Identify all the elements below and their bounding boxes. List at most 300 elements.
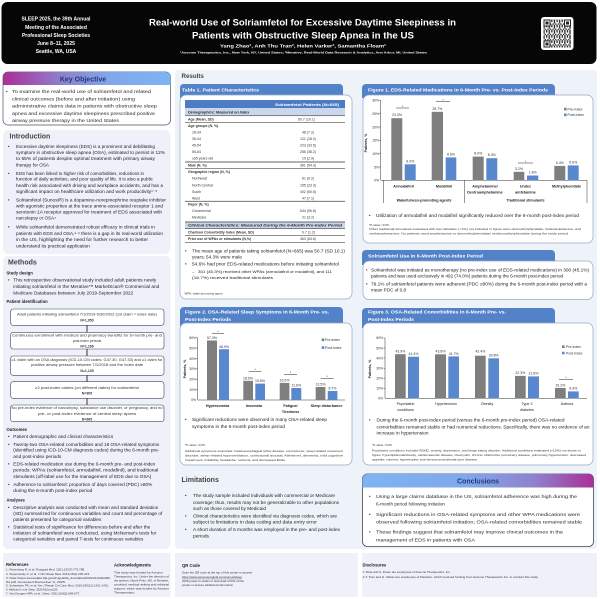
study design: Medicare Databases between July 2019-September 2022 <box>13 290 134 296</box>
table 1 data: Commercial <box>192 209 211 213</box>
flow diagram: patient identification: pre- or post-index evidence of central sleep apnea <box>38 412 136 416</box>
figure 2 takeaway: symptoms in the 6-month post-index period <box>192 424 286 429</box>
analyses: • <box>8 505 10 510</box>
study design: initiating solriamfetol in the Merative™ MarketScan® Commercial and <box>13 284 160 289</box>
introduction heading: Introduction <box>10 134 50 140</box>
figure 3 legend <box>562 345 583 355</box>
conclusions header <box>362 474 594 488</box>
bar chart: comorbidities: 43.9% <box>395 350 405 354</box>
table 1 data: ≥65 years old <box>192 157 213 161</box>
QR code text: Scan the QR code at the top of this poster to access <box>182 570 253 574</box>
bar chart: sleep symptoms: 30% <box>189 367 196 371</box>
bar chart: comorbidities: 42.4% <box>475 350 485 354</box>
figure 3 footnotes <box>372 443 586 462</box>
introduction bullets: with agonistic properties at the trace amine-associated receptor 1 and <box>16 203 164 208</box>
bar chart: comorbidities <box>368 336 587 412</box>
limitations heading: Limitations <box>182 477 219 484</box>
flow diagram: patient identification: Continuous enrollment with medical and pharmacy benefits for 6-month pre- and <box>12 334 162 338</box>
table 1 title: Table 1. Patient Characteristics <box>182 88 260 92</box>
QR code heading: QR Code <box>182 563 201 568</box>
analyses: (SD) summarized for continuous variables and count and percentage of <box>13 511 163 516</box>
conclusions heading: Conclusions <box>457 478 499 486</box>
figure 2 title: Figure 2. OSA-Related Sleep Symptoms in 6-Month Pre- vs. <box>185 310 329 314</box>
bar chart: sleep symptoms <box>183 330 345 414</box>
figure 3 takeaway: increase in hypertension <box>376 430 429 436</box>
figure 3 takeaway <box>369 418 590 436</box>
disclosures text: A.T. Tran and H. Varker are employees of Merative, which received funding from Axsome Therapeutics Inc. to conduct this study. <box>362 575 539 579</box>
outcomes: periods: WPAs (solriamfetol, armodafinil, modafinil), and traditional <box>13 468 158 472</box>
bar chart: EDS-related medications: 8.6% <box>447 152 455 156</box>
limitations bullets: A short duration of 6 months was employed in the pre- and post-index <box>193 527 341 532</box>
acknowledgments: the authors, Nicole Pinto, MS, of Merative, <box>114 578 169 582</box>
disclosures text <box>362 570 539 579</box>
table 1 data: Payor (N, %) <box>188 203 209 207</box>
table 1 data: South <box>192 190 201 194</box>
panel: table 1 <box>180 84 352 299</box>
solriamfetol use bullets: • <box>366 282 368 287</box>
flow diagram: patient identification: N=905 <box>82 392 92 396</box>
bar chart: sleep symptoms: 15.8% <box>255 379 265 383</box>
outcomes: • <box>8 442 10 447</box>
figure 1 footnotes: Other traditional stimulants evaluated with low utilization (<1%) not included in figure were dexmethylphenidate, lisdexamfetamine, and <box>369 227 581 231</box>
limitations bullets: • <box>185 527 187 532</box>
table 1 data: 0.7 (1.2) <box>302 230 315 234</box>
table 1 data: 223 (33.5) <box>300 144 316 148</box>
figure 2 legend: Pre-index <box>325 338 340 342</box>
references: lbl.pdf. Accessed December 9, 2025. <box>6 580 66 584</box>
panel: introduction <box>3 130 170 254</box>
introduction bullets: to 65% of patients despite optimal treatment with primary airway <box>16 156 156 161</box>
figure 1 legend: Pre-index <box>568 107 583 111</box>
introduction bullets: Solriamfetol (Sunosi®) is a dopamine-norepinephrine reuptake inhibitor <box>16 197 167 202</box>
bar chart: EDS-related medications: amfetamine <box>515 190 536 194</box>
key objective text <box>6 89 158 123</box>
flow diagram: patient identification: N=1,135 <box>80 369 94 373</box>
table 1 data: Age groups (N, %) <box>188 124 218 128</box>
conclusions bullets: • <box>369 512 371 517</box>
conclusions bullets: management of EDS in patients with OSA <box>376 538 475 543</box>
methods heading: Methods <box>8 260 37 266</box>
introduction bullets <box>8 144 167 248</box>
figure 2 footnotes: disorder, sleep-related hypoventilation, confusional arousal, Alzheimer, dementia, mild cognitive <box>185 454 343 458</box>
bar chart: EDS-related medications: 10% <box>372 152 379 156</box>
bar chart: comorbidities: Obesity <box>481 402 493 406</box>
acknowledgments: provided medical writing and editorial <box>114 583 169 587</box>
figure 1 title: Figure 1. EDS-Related Medications in 6-Month Pre- vs. Post-Index Periods <box>368 88 548 92</box>
figure 3 takeaway: During the 6-month post-index period (versus the 6-month pre-index period) OSA-related <box>376 418 565 422</box>
introduction bullets: • <box>8 224 10 229</box>
bar chart: EDS-related medications: Traditional stimulants <box>506 198 545 202</box>
figure 2 takeaway: Significant reductions were observed in many OSA-related sleep <box>192 417 328 422</box>
bar chart: comorbidities: Patients, % <box>368 359 372 378</box>
solriamfetol use bullets: 79.1% of solriamfetol patients were adherent (PDC ≥80%) during the 6-month post-index period with a <box>371 282 588 287</box>
figure 2 footnotes <box>185 443 343 462</box>
outcomes: stimulants (off-label use for the management of EDS due to OSA) <box>13 474 152 479</box>
figure 3 footnotes: *P-value <0.05. <box>372 443 393 447</box>
limitations bullets: • <box>185 493 187 498</box>
table 1 data: West <box>192 196 200 200</box>
flow diagram: patient identification: ≥2 post-index claims (on different dates) for solriamfetol <box>35 386 139 390</box>
limitations bullets <box>185 493 341 538</box>
introduction bullets: While solriamfetol demonstrated robust efficacy in clinical trials in <box>16 224 156 229</box>
bar chart: comorbidities: 41.4% <box>409 352 418 356</box>
disclosures text: Y. Zhao and S. Floam are employees of Axsome Therapeutics, Inc. <box>362 570 451 574</box>
table 1 takeaways: (16.7%) received traditional stimulants <box>192 276 273 280</box>
bar chart: sleep symptoms: Patients, % <box>183 359 187 378</box>
bar chart: sleep symptoms: Tiredness <box>282 410 299 414</box>
outcomes: Patient demographic and clinical characteristics <box>13 434 113 439</box>
bar chart: sleep symptoms: Insomnia <box>246 404 263 408</box>
table 1 data: Geographic region (N, %) <box>188 170 230 174</box>
conclusions bullets: Using a large claims database in the US, solriamfetol adherence was high during the <box>376 494 578 499</box>
bar chart: sleep symptoms: 60% <box>189 336 196 340</box>
figure 3 title: Figure 3. OSA-Related Comorbidities in 6-Month Pre- vs. <box>368 310 506 314</box>
table 1 data: Medicare <box>192 216 206 220</box>
references: 3. https://www.accessdata.fda.gov/drugsatfda_docs/label/2022/211230s006 <box>6 576 110 580</box>
figure 2 footnotes: Additional symptoms examined: Gastroesophageal reflux disease, somnolence, sleep-related movement <box>185 449 343 453</box>
acknowledgments <box>114 562 169 595</box>
bar chart: EDS-related medications: 8.3% <box>488 153 496 157</box>
bar chart: comorbidities: 10.2% <box>555 383 565 387</box>
analyses: Statistical tests of significance for differences before and after the <box>13 524 151 530</box>
bar chart: sleep symptoms: Sleep disturbance <box>311 404 342 408</box>
QR code text: poster or access additional information. <box>182 583 234 587</box>
bar chart: EDS-related medications: Methylphenidate <box>552 184 581 188</box>
panel: solriamfetol use <box>362 250 593 300</box>
conclusions bullets: These findings suggest that solriamfetol may improve clinical outcomes in the <box>376 530 564 535</box>
introduction bullets: • <box>8 144 10 149</box>
bar chart: sleep symptoms: 11.6% <box>291 384 301 388</box>
table 1 data: Demographics: Measured on Index <box>188 111 250 115</box>
table 1 data: 21 (3.2) <box>302 216 314 220</box>
acknowledgments: Therapeutics. <box>114 591 135 595</box>
introduction bullets: in the US, highlighting the need for further research to better <box>16 237 149 242</box>
bar chart: EDS-related medications: Patients, % <box>364 133 368 152</box>
table 1 data: 155 (23.3) <box>300 183 316 187</box>
bar chart: EDS-related medications: 1.8% <box>529 170 537 174</box>
bar chart: comorbidities: 30% <box>376 366 383 370</box>
QR code text <box>182 570 253 587</box>
conclusions bullets: observed following solriamfetol initiation; OSA-related comorbidities remained stable <box>376 520 583 524</box>
references <box>6 562 110 595</box>
outcomes <box>6 427 160 493</box>
introduction bullets: EDS has been linked to higher risk of comorbidities, reductions in <box>16 171 145 176</box>
bar chart: comorbidities: Type 2 <box>521 402 533 406</box>
figure 3 title <box>368 310 506 322</box>
table 1 data: Male (N, %) <box>188 163 207 167</box>
bar chart: EDS-related medications: 23.3% <box>392 113 402 117</box>
panel: figure 1 <box>362 84 593 243</box>
table 1 takeaways: 54.6% had prior EDS-related medications before initiating solriamfetol <box>192 262 339 266</box>
references: References <box>6 562 29 567</box>
figure 3 footnotes: appetite, nausea, hypertrophic and temporomandibular joint disease. <box>372 458 478 462</box>
analyses: categorical variables and paired T-tests for continuous variables <box>13 536 143 542</box>
introduction bullets: health risk associated with driving and workplace accidents, and has a <box>16 183 164 188</box>
outcomes: • <box>8 462 10 466</box>
bar chart: comorbidities: Asthma <box>561 402 574 406</box>
bar chart: sleep symptoms: * <box>326 375 328 379</box>
introduction bullets: serotonin 1A receptor approved for treatment of EDS associated with <box>16 209 163 214</box>
limitations bullets: periods <box>193 534 209 538</box>
flow diagram: patient identification: N=1,166 <box>80 345 94 349</box>
analyses: Descriptive analysis was conducted with mean and standard deviation <box>13 505 159 510</box>
introduction bullets: significant impact on healthcare utilization and work productivity¹⁻³ <box>16 189 158 194</box>
table 1 data: 363 (54.6) <box>300 237 316 241</box>
table 1 takeaways: 301 (45.3%) received other WPAs (armodafinil or modafinil), and 111 <box>198 270 332 274</box>
bar chart: comorbidities: 21.8% <box>529 372 538 376</box>
bar chart: sleep symptoms: 40% <box>189 357 196 361</box>
bar chart: EDS-related medications: 20% <box>372 125 379 129</box>
key objective header <box>3 72 170 85</box>
study design: This retrospective observational study included adult patients newly <box>13 278 157 282</box>
bar chart: EDS-related medications: Amphetamine/ <box>472 184 498 188</box>
solriamfetol use bullets: patients and was used exclusively in 492 (74.0%) patients during the 6-month post-index period <box>371 273 564 278</box>
figure 1 footnotes <box>369 223 581 235</box>
introduction bullets: Excessive daytime sleepiness (EDS) is a prominent and debilitating <box>16 144 156 149</box>
key objective text: To examine the real-world use of solriamfetol and related <box>12 89 152 94</box>
figure 3 takeaway: • <box>369 418 371 422</box>
bar chart: comorbidities: 6.9% <box>569 387 577 391</box>
introduction bullets: patients with EDS and OSA,⁵·⁶ there is a gap in its real-world utilization <box>16 231 164 236</box>
acknowledgments: Acknowledgments <box>114 562 152 568</box>
table 1 data <box>185 100 345 242</box>
table 1 data: 50.7 (10.1) <box>298 118 315 122</box>
table 1 data: 55-64 <box>192 150 201 154</box>
poster title: Patients with Obstructive Sleep Apnea in the US <box>192 30 414 40</box>
bar chart: sleep symptoms: 20% <box>189 378 196 382</box>
acknowledgments: Therapeutics, Inc. Under the direction of <box>114 575 169 579</box>
bar chart: sleep symptoms: Hypersomnia <box>206 404 230 408</box>
bar chart: sleep symptoms: 12.5% <box>316 383 325 387</box>
limitations bullets: such as those covered by Medicaid <box>193 506 267 511</box>
poster title <box>149 18 456 40</box>
table 1 data: 18-34 <box>192 130 201 134</box>
panel: references and acknowledgments <box>3 553 170 597</box>
outcomes: and post-index periods <box>13 454 61 459</box>
conference information: Professional Sleep Societies <box>22 33 90 39</box>
table 1 data: 256 (38.2) <box>300 150 316 154</box>
solriamfetol use bullets: Solriamfetol was initiated as monotherapy (no pre-index use of EDS-related medications) in 300 (45.1%) <box>371 267 590 272</box>
solriamfetol use title: Solriamfetol Use in 6-Month Post-Index Period <box>368 254 483 258</box>
analyses: patients presented for categorical variables <box>13 517 101 522</box>
bar chart: sleep symptoms: 0% <box>191 398 196 402</box>
bar chart: EDS-related medications: * <box>525 160 527 164</box>
key objective text: clinical outcomes (before and after initiation) using <box>12 96 136 102</box>
table 1 data: 19 (2.9) <box>302 157 314 161</box>
bar chart: sleep symptoms: 8.7% <box>329 387 336 391</box>
bar chart: EDS-related medications: * <box>442 98 444 102</box>
table 1 data: 47 (7.1) <box>302 196 314 200</box>
bar chart: EDS-related medications: 25% <box>372 112 379 116</box>
introduction bullets: • <box>8 197 10 202</box>
conclusions bullets: • <box>369 494 371 499</box>
figure 2 takeaway: • <box>185 417 187 422</box>
figure 2 legend: Post-index <box>325 346 342 350</box>
solriamfetol use bullets: mean PDC of 0.8 <box>371 288 407 292</box>
figure 1 legend: Post-index <box>568 113 584 117</box>
bar chart: comorbidities: 40% <box>376 356 383 360</box>
figure 3 footnotes: Psychiatric conditions included ADHD, anxiety, depression, and binge eating disorder. Additional conditions evaluated (>10%) not shown in <box>372 448 581 452</box>
figure 2 title <box>185 310 329 322</box>
bar chart: EDS-related medications: 5% <box>374 165 379 169</box>
conclusions bullets: • <box>369 530 371 535</box>
conference information: Seattle, WA, USA <box>36 49 77 55</box>
bar chart: EDS-related medications: 25.7% <box>432 107 442 111</box>
bar chart: sleep symptoms: * <box>290 371 292 375</box>
references: 5. Schweitzer PK, et al. Am J Respir Crit Care Med. 2019;199(11):1421-1431. <box>6 583 109 587</box>
outcomes: (identified using ICD-10-CM diagnosis codes) during the 6-month pre- <box>13 448 160 452</box>
table 1 takeaways: • <box>185 262 187 266</box>
analyses: • <box>8 524 10 530</box>
outcomes: Adherence to solriamfetol: proportion of days covered (PDC) ≥80% <box>13 482 152 487</box>
bar chart: sleep symptoms: Fatigue/ <box>283 404 298 408</box>
bar chart: comorbidities: 22.3% <box>515 371 525 375</box>
study design: Study design <box>6 270 33 276</box>
figure 2 legend <box>322 338 342 350</box>
references: 7. Van Dongen HPA, et al. Chest. 2021;160(2):669-677. <box>6 591 80 595</box>
flow diagram: patient identification: N=665 <box>82 418 92 422</box>
figure 2 title: Post-Index Periods <box>185 317 231 322</box>
bar chart: EDS-related medications: Wakefulness-promoting agents <box>397 198 451 202</box>
table 1 takeaways: – <box>192 270 195 274</box>
flow diagram: patient identification: No pre-index evidence of narcolepsy, substance use disorder, or pregnancy, and no <box>12 406 163 410</box>
bar chart: comorbidities: * <box>565 376 567 380</box>
references: 2. Stepnowsky C, et al. J Clin Sleep Med. 2019;15(2):235-243. <box>6 572 90 576</box>
figure 3 legend: Post-index <box>566 351 583 355</box>
figure 1 footnotes: methamphetamine. No patients used amphetamine or dexmethylphenidate/ serdexmethylphenidate during the study period. <box>369 231 569 235</box>
bar chart: EDS-related medications: * <box>402 105 404 109</box>
authors <box>180 44 427 54</box>
table 1 data: 644 (96.8) <box>300 209 316 213</box>
figure 3 takeaway: comorbidities remained stable or had numerical reductions. Specifically, there was no evidence of an <box>376 424 590 430</box>
limitations bullets: coverage; thus, results may not be generalizable to other populations <box>193 500 339 505</box>
outcomes: • <box>8 434 10 439</box>
panel: key objective <box>3 72 170 125</box>
conference information <box>22 16 91 55</box>
bar chart: EDS-related medications: Undec <box>520 184 531 188</box>
bar chart: sleep symptoms: 18.5% <box>243 376 253 380</box>
introduction bullets: symptom in obstructive sleep apnea (OSA), estimated to persist in 12% <box>16 150 165 155</box>
solriamfetol use bullets: • <box>366 267 368 272</box>
figure 1 footnotes: *P-value <0.05. <box>369 223 390 227</box>
bar chart: comorbidities: 10% <box>376 386 383 390</box>
table 1 takeaways: years; 54.3% were male <box>192 254 243 260</box>
study design <box>6 270 160 296</box>
analyses: Analyses <box>6 498 26 502</box>
bar chart: comorbidities: 41.7% <box>449 352 459 356</box>
flow diagram: patient identification: N=1,050 <box>80 318 94 322</box>
table 1 takeaways <box>185 248 346 280</box>
bar chart: EDS-related medications: Armodafinil <box>393 184 414 188</box>
flow diagram: patient identification: Adult patients initiating solriamfetol 7/1/2019-9/30/2022 (1st claim = index date) <box>17 313 157 317</box>
limitations bullets: • <box>185 514 187 518</box>
bar chart: sleep symptoms: 16.5% <box>280 378 289 382</box>
introduction bullets: understand its practical application <box>16 243 91 248</box>
bar chart: EDS-related medications <box>364 98 587 203</box>
figure 1 takeaway: Utilization of armodafinil and modafinil significantly reduced over the 6-month post-index period <box>376 213 580 218</box>
figure 2 footnotes: *P-value <0.05. <box>185 443 206 447</box>
table 1 data: North Central <box>192 183 213 187</box>
flow diagram: patient identification: post-index periods <box>73 339 102 343</box>
conclusions bullets <box>369 494 583 543</box>
table 1 footnote: WPA, wake-promoting agent. <box>184 292 223 296</box>
patient identification heading: Patient identification <box>6 299 48 304</box>
bar chart: comorbidities: conditions <box>397 408 414 412</box>
limitations bullets: The study sample included individuals with commercial or Medicare <box>193 493 336 498</box>
table 1 data: 61 (9.2) <box>302 177 314 181</box>
figure 3 footnotes: figure: hyperlipidemia/obesity, cardiovascular disease, chest pain, chronic obstructive pulmonary disease, pulmonary hypertension, decreased <box>372 453 586 457</box>
panel: figure 3 <box>362 308 593 465</box>
table 1 data: Charlson Comorbidity Index (Mean, SD) <box>188 230 254 234</box>
QR code text: 2025-poster to obtain or download a PDF of this <box>182 579 244 583</box>
flow diagram: patient identification: ≥1 claim with an OSA diagnosis (ICD-10-CM codes: G47.30, G47.33) and ≥1 claim for <box>12 358 163 362</box>
table 1 data: Age (Mean, SD) <box>188 118 214 122</box>
table 1 data: 121 (18.2) <box>300 137 316 141</box>
panel: disclosures <box>362 553 597 597</box>
introduction bullets: • <box>8 171 10 176</box>
bar chart: sleep symptoms: 50% <box>189 346 196 350</box>
table 1 data: 48 (7.2) <box>302 130 314 134</box>
solriamfetol use bullets <box>366 267 590 292</box>
analyses <box>6 498 163 542</box>
acknowledgments: This study was funded by Axsome <box>114 571 163 575</box>
table 1 data: 35-44 <box>192 137 201 141</box>
conference information: SLEEP 2025, the 39th Annual <box>22 16 91 22</box>
references: 6. Malhotra A, et al. Sleep. 2020;43(2):zsz220. <box>6 587 58 591</box>
bar chart: sleep symptoms: 57.3% <box>207 336 217 340</box>
poster title: Real-world Use of Solriamfetol for Excessive Daytime Sleepiness in <box>149 18 456 28</box>
QR code <box>541 17 574 50</box>
table 1 takeaways: • <box>185 248 187 254</box>
analyses: initiation of solriamfetol were conducted, using McNemar's tests for <box>13 530 157 536</box>
bar chart: EDS-related medications: 30% <box>372 99 379 103</box>
flow diagram: patient identification <box>11 309 164 422</box>
bar chart: comorbidities: diabetes <box>520 408 534 412</box>
bar chart: comorbidities: Hypertension <box>435 402 457 406</box>
bar chart: comorbidities: 60% <box>376 336 383 340</box>
bar chart: sleep symptoms: * <box>217 330 219 334</box>
bar chart: EDS-related medications: 15% <box>372 139 379 143</box>
bar chart: comorbidities: 39.8% <box>489 354 499 358</box>
table 1 data: Northeast <box>192 177 207 181</box>
introduction bullets: narcolepsy or OSA⁴ <box>16 215 56 220</box>
bar chart: sleep symptoms: 48.9% <box>219 345 229 349</box>
table 1 data: 45-54 <box>192 144 201 148</box>
bar chart: EDS-related medications: 5.6% <box>569 160 577 164</box>
bar chart: comorbidities: Psychiatric <box>397 402 415 406</box>
bar chart: EDS-related medications: Dextroamphetamine <box>467 190 503 194</box>
panel: limitations <box>182 477 341 538</box>
conference information: June 8–11, 2025 <box>37 41 75 47</box>
outcomes: Outcomes <box>6 427 28 432</box>
key objective text: administrative claims data in patients with obstructive sleep <box>12 104 158 108</box>
conclusions bullets: 6-month period following initiation <box>376 502 446 507</box>
authors: ¹Axsome Therapeutics, Inc., New York, NY, United States; ²Merative, Real-World Data Research & Analytics, Ann Arbor, MI, United States <box>180 50 427 54</box>
figure 3 legend: Pre-index <box>566 345 581 349</box>
outcomes: during the 6-month post-index period <box>13 488 93 493</box>
panel: QR code note <box>175 553 358 597</box>
results heading: Results <box>182 73 204 80</box>
figure 2 footnotes: impairment, irritability, headache, nocturia, and decreased libido. <box>185 458 286 462</box>
outcomes: Twenty-two OSA-related comorbidities and 19 OSA-related symptoms <box>13 442 159 447</box>
acknowledgments: support, which was funded by Axsome <box>114 587 169 591</box>
bar chart: sleep symptoms: 10% <box>189 388 196 392</box>
study design: • <box>8 278 10 282</box>
outcomes: • <box>8 482 10 487</box>
panel: figure 2 <box>180 307 352 465</box>
bar chart: comorbidities: 20% <box>376 376 383 380</box>
bar chart: EDS-related medications: 8.9% <box>474 152 482 156</box>
